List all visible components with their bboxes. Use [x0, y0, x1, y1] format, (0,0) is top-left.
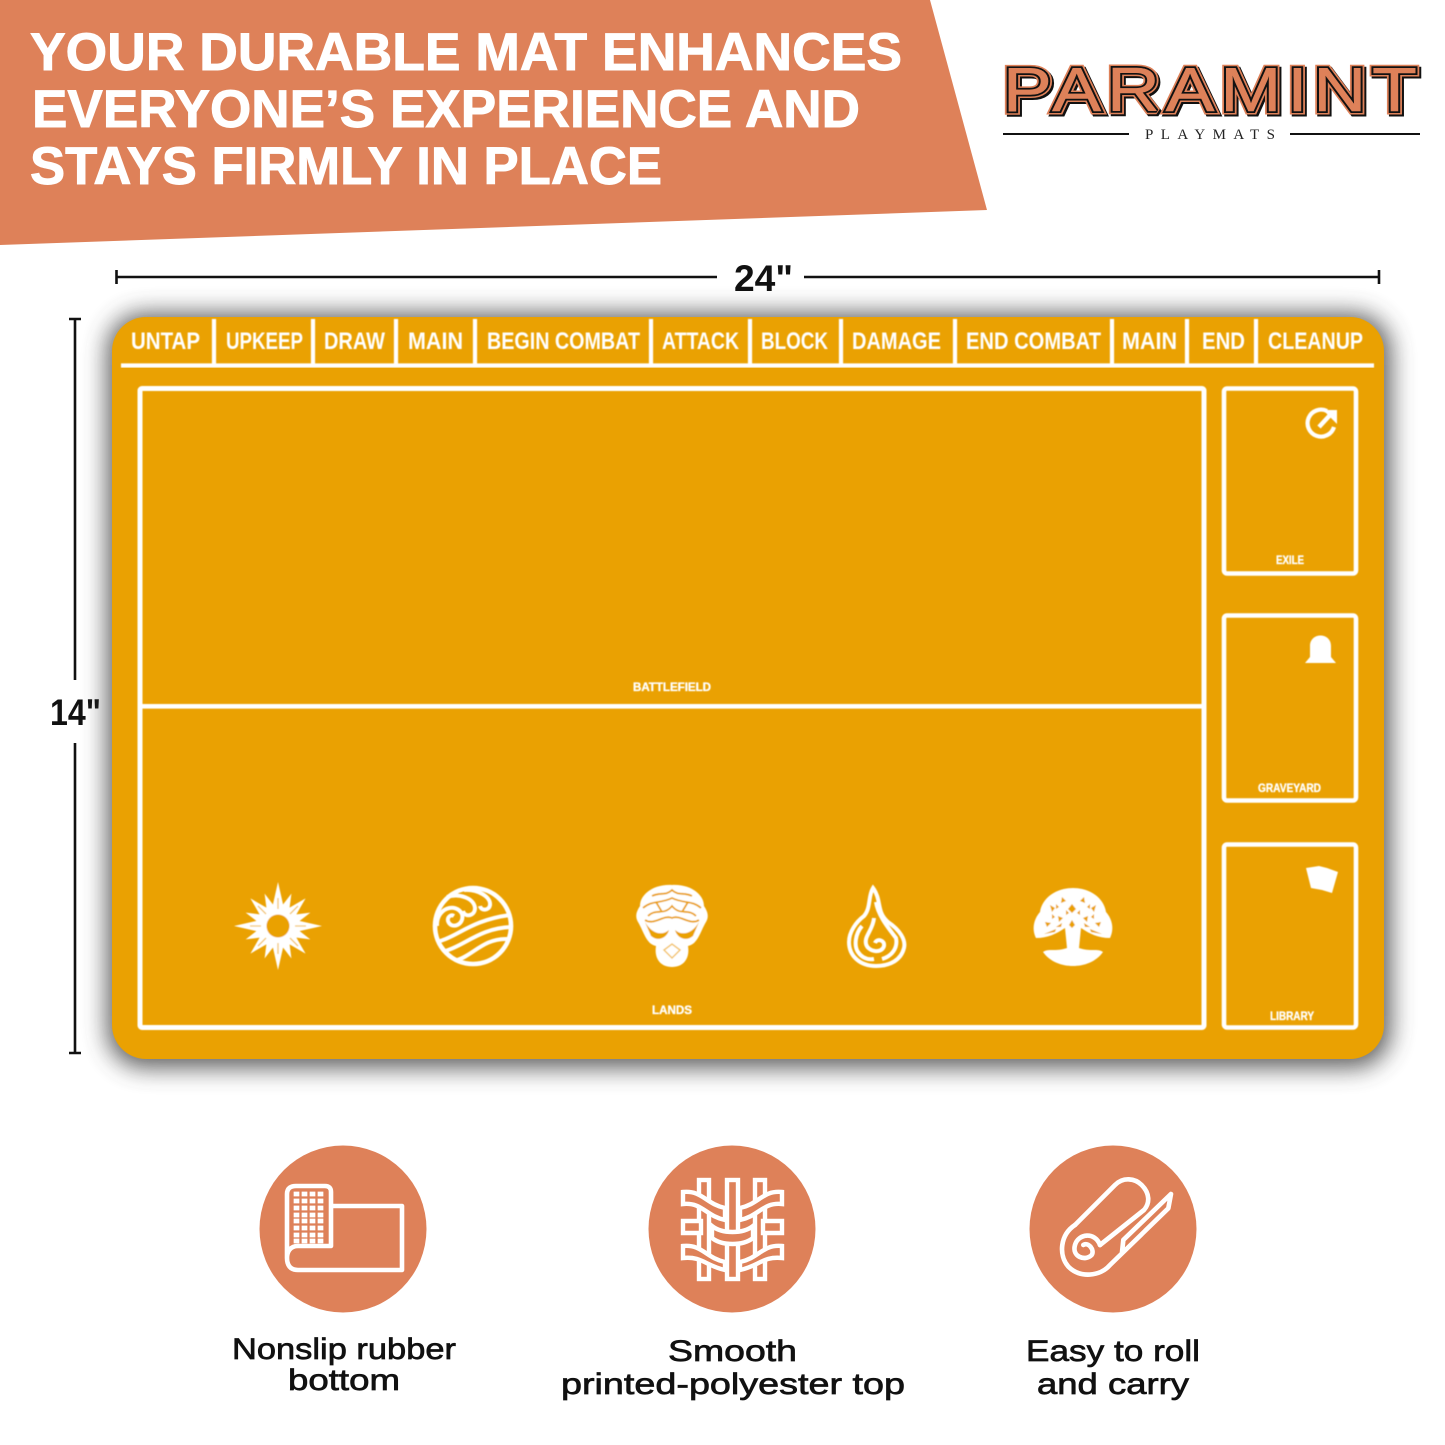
playmat [107, 313, 1391, 1068]
brand logo: PARAMINT [1003, 56, 1423, 125]
brand logo: PARAMINT [1005, 58, 1425, 127]
feature: smooth printed-polyester top [561, 1146, 905, 1401]
graveyard zone: GRAVEYARD [1258, 781, 1321, 795]
phase tabs: MAIN [1122, 328, 1177, 355]
phase tabs: CLEANUP [1268, 328, 1363, 355]
battlefield and lands zones: LANDS [652, 1003, 692, 1017]
phase tabs: MAIN [408, 328, 463, 355]
height dimension: 14 inches: 14" [50, 692, 101, 733]
phase tabs: BLOCK [761, 328, 829, 355]
library zone: LIBRARY [1270, 1009, 1314, 1023]
caption [561, 1335, 905, 1401]
icon: rolled mat [1030, 1146, 1196, 1312]
icon: exile arrow [1308, 410, 1337, 437]
brand logo: PARAMINT [1003, 56, 1423, 125]
icon: sun land [234, 882, 322, 970]
feature: nonslip rubber bottom [232, 1146, 456, 1397]
icon: forest land [1034, 888, 1112, 966]
height dimension: 14 inches [50, 319, 101, 1053]
phase tabs: DRAW [324, 328, 385, 355]
phase tabs: BEGIN COMBAT [487, 328, 640, 355]
caption: Smooth [668, 1335, 797, 1368]
width dimension: 24 inches: 24" [734, 258, 793, 299]
icon: water land [435, 888, 511, 964]
phase tabs: UPKEEP [226, 328, 303, 355]
phase tabs: ATTACK [662, 328, 740, 355]
caption: Easy to roll [1026, 1335, 1200, 1368]
brand logo: PARAMINT [1003, 56, 1423, 125]
battlefield and lands zones [140, 388, 1204, 1028]
icon: mind land [636, 885, 708, 967]
battlefield and lands zones: BATTLEFIELD [633, 680, 711, 694]
width dimension: 24 inches [116, 258, 1379, 299]
library zone [1224, 844, 1356, 1028]
caption: and carry [1037, 1368, 1189, 1401]
caption [1026, 1335, 1200, 1401]
icon: woven fabric [648, 1146, 816, 1312]
phase tabs: END [1202, 328, 1245, 355]
banner headline: YOUR DURABLE MAT ENHANCES [30, 23, 902, 82]
banner headline: STAYS FIRMLY IN PLACE [30, 137, 662, 196]
banner headline [30, 23, 902, 196]
icon: rubber-backed mat [260, 1146, 426, 1312]
caption: printed-polyester top [561, 1368, 905, 1401]
brand logo: PLAYMATS [1145, 127, 1275, 143]
caption [232, 1333, 456, 1397]
feature: easy to roll and carry [1026, 1146, 1200, 1401]
exile zone: EXILE [1276, 553, 1304, 567]
caption: bottom [288, 1364, 400, 1397]
banner headline: EVERYONE’S EXPERIENCE AND [32, 80, 860, 139]
icon: cards [1306, 866, 1338, 893]
icon: fire land [849, 888, 904, 966]
caption: Nonslip rubber [232, 1333, 456, 1366]
phase tabs: DAMAGE [852, 328, 941, 355]
phase tabs [121, 319, 1374, 366]
graveyard zone [1224, 616, 1356, 800]
icon: tombstone [1305, 636, 1336, 663]
header banner [0, 0, 987, 245]
phase tabs: UNTAP [131, 328, 200, 355]
exile zone [1224, 388, 1356, 574]
phase tabs: END COMBAT [966, 328, 1101, 355]
